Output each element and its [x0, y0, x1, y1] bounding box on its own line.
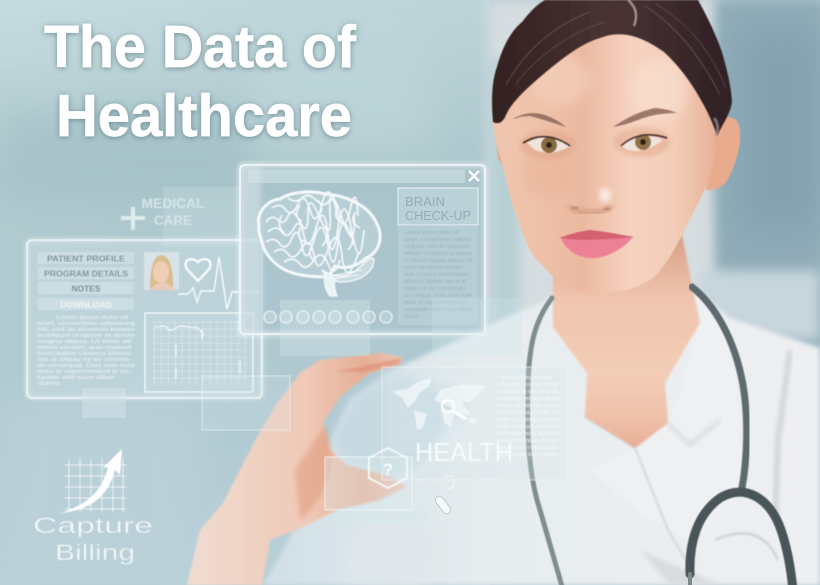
brain check-up heading: BRAIN — [405, 194, 445, 209]
logo wordmark: Capture — [33, 513, 153, 538]
hair parting highlight — [506, 0, 726, 136]
brain check-up text column: ullamco laboris nisi ut al — [404, 279, 466, 285]
health text column: Duis aute irure dolor — [497, 452, 559, 458]
brain check-up text column: cing elit, sed do eiusmod — [404, 244, 469, 250]
brain check-up text column: voluptate velit esse cillum — [404, 307, 472, 313]
title: Healthcare — [56, 84, 352, 150]
face highlights and shading — [519, 55, 688, 197]
left ear — [494, 122, 506, 170]
brain check-up text column: enim ad minim veniam, — [404, 265, 464, 271]
title: The Data of — [44, 14, 356, 80]
panel: health — [382, 367, 567, 480]
lorem ipsum paragraph: Lorem ipsum dolor sit — [56, 315, 128, 321]
menu button: notes — [38, 282, 134, 294]
health text column: enim ad minim veniam — [497, 417, 559, 423]
left eye — [523, 137, 570, 153]
health text column: Lorem ipsum dolor — [502, 375, 552, 381]
lorem ipsum paragraph: incididunt ut labore et dolore — [37, 333, 135, 339]
panel: brain check-up — [240, 165, 522, 356]
title — [44, 14, 356, 150]
menu button: patient profile: PATIENT PROFILE — [47, 254, 125, 264]
heart icon — [185, 259, 211, 281]
pill icon — [434, 495, 452, 515]
title: The Data of — [44, 15, 356, 81]
capture billing logo — [33, 449, 153, 565]
health text column: nisi ut aliquip ex ea — [497, 438, 560, 444]
lorem ipsum paragraph: amet, consectetur adipisicing — [37, 321, 135, 327]
lorem ipsum paragraph: minim veniam, quis nostrud — [37, 345, 131, 351]
health text column — [497, 375, 560, 458]
right ear — [706, 117, 740, 190]
logo arrow — [61, 449, 122, 513]
question panel — [325, 448, 428, 524]
health text column: tion ullamco laboris — [497, 431, 559, 437]
lorem ipsum paragraph: elit, sed do eiusmod tempor — [37, 327, 135, 333]
brain illustration — [259, 192, 380, 296]
corner glow — [432, 298, 522, 356]
health text column: sit amet, consectetur — [497, 382, 559, 388]
lorem ipsum paragraph: dolore. — [38, 381, 63, 387]
eyebrows — [514, 108, 677, 127]
health text column: adipisicing elit, sed do — [497, 389, 559, 395]
doctor's neck — [553, 235, 700, 448]
capture billing logo: Billing — [55, 540, 135, 565]
right eye — [621, 134, 667, 151]
floating glass panel — [202, 376, 290, 430]
floating glass tile — [82, 388, 126, 418]
lips — [559, 230, 634, 258]
brain scan thumbnails row — [264, 300, 392, 356]
health text column: idunt ut labore et do — [497, 403, 559, 409]
health text column: quis nostrud exercita — [497, 424, 560, 430]
face — [493, 30, 716, 293]
lorem ipsum paragraph: nisi ut aliquip ex ea commo- — [37, 357, 131, 363]
logo grid — [65, 458, 126, 512]
brain check-up heading — [398, 188, 478, 225]
brain check-up text column: dolore. — [404, 314, 420, 320]
hair — [492, 0, 732, 136]
world map — [392, 378, 486, 430]
lorem ipsum paragraph: magna aliqua. Ut enim ad — [37, 339, 131, 345]
patient photo — [144, 252, 179, 290]
close icon — [469, 171, 479, 181]
health text column: eiusmod tempor incid — [497, 396, 559, 402]
lorem ipsum paragraph: do consequat. Duis aute irure — [37, 363, 135, 369]
brain check-up heading: CHECK-UP — [405, 208, 471, 223]
medical care label: MEDICAL — [142, 195, 205, 211]
title: Healthcare — [56, 83, 352, 149]
brain check-up text column: iquip ex ea commodo — [404, 286, 466, 292]
doctor's head — [492, 0, 740, 293]
menu button: patient profile — [38, 252, 134, 264]
panel: patient profile — [27, 240, 262, 398]
hook icon — [442, 476, 454, 488]
doctor's white coat — [263, 287, 820, 585]
medical care label — [121, 187, 238, 247]
health text column: lore magna aliqua. Ut — [497, 410, 559, 416]
brain check-up text column: quis nostrud exercitation — [404, 272, 469, 278]
brain check-up text column: tempor incididunt ut labore — [404, 251, 472, 257]
health text column: commodo consequat. — [497, 445, 559, 451]
menu button: notes: NOTES — [72, 284, 101, 294]
nose — [569, 188, 612, 212]
brain check-up text column: amet, consectetur adipisi- — [404, 237, 472, 243]
title bar — [248, 170, 465, 183]
ecg chart — [145, 313, 253, 392]
hexagon question icon: ? — [383, 460, 393, 479]
menu button: download — [38, 298, 134, 310]
brain check-up text column — [398, 225, 478, 325]
lorem ipsum paragraph: exercitation ullamco laboris — [37, 351, 131, 357]
magnifier — [442, 400, 466, 419]
holographic hand — [187, 353, 407, 585]
brain check-up text column: dolor in reprehenderit in — [404, 300, 466, 306]
medical care label: CARE — [154, 212, 192, 228]
menu button: download: DOWNLOAD — [60, 300, 112, 310]
brain check-up text column: Lorem ipsum dolor sit — [404, 230, 459, 236]
lorem ipsum paragraph: dolor in reprehenderit in vo- — [37, 369, 131, 375]
stethoscope — [528, 287, 793, 585]
brain check-up text column: et dolore magna aliqua. Ut — [404, 258, 472, 264]
lorem ipsum paragraph — [37, 315, 135, 387]
ecg line — [178, 257, 262, 309]
health label: HEALTH — [415, 437, 513, 467]
lorem ipsum paragraph: luptate velit esse cillum — [37, 375, 115, 381]
eye shadows — [520, 127, 670, 160]
menu button: program details: PROGRAM DETAILS — [44, 268, 128, 278]
brain check-up text column: consequat. Duis aute irure — [404, 293, 472, 299]
